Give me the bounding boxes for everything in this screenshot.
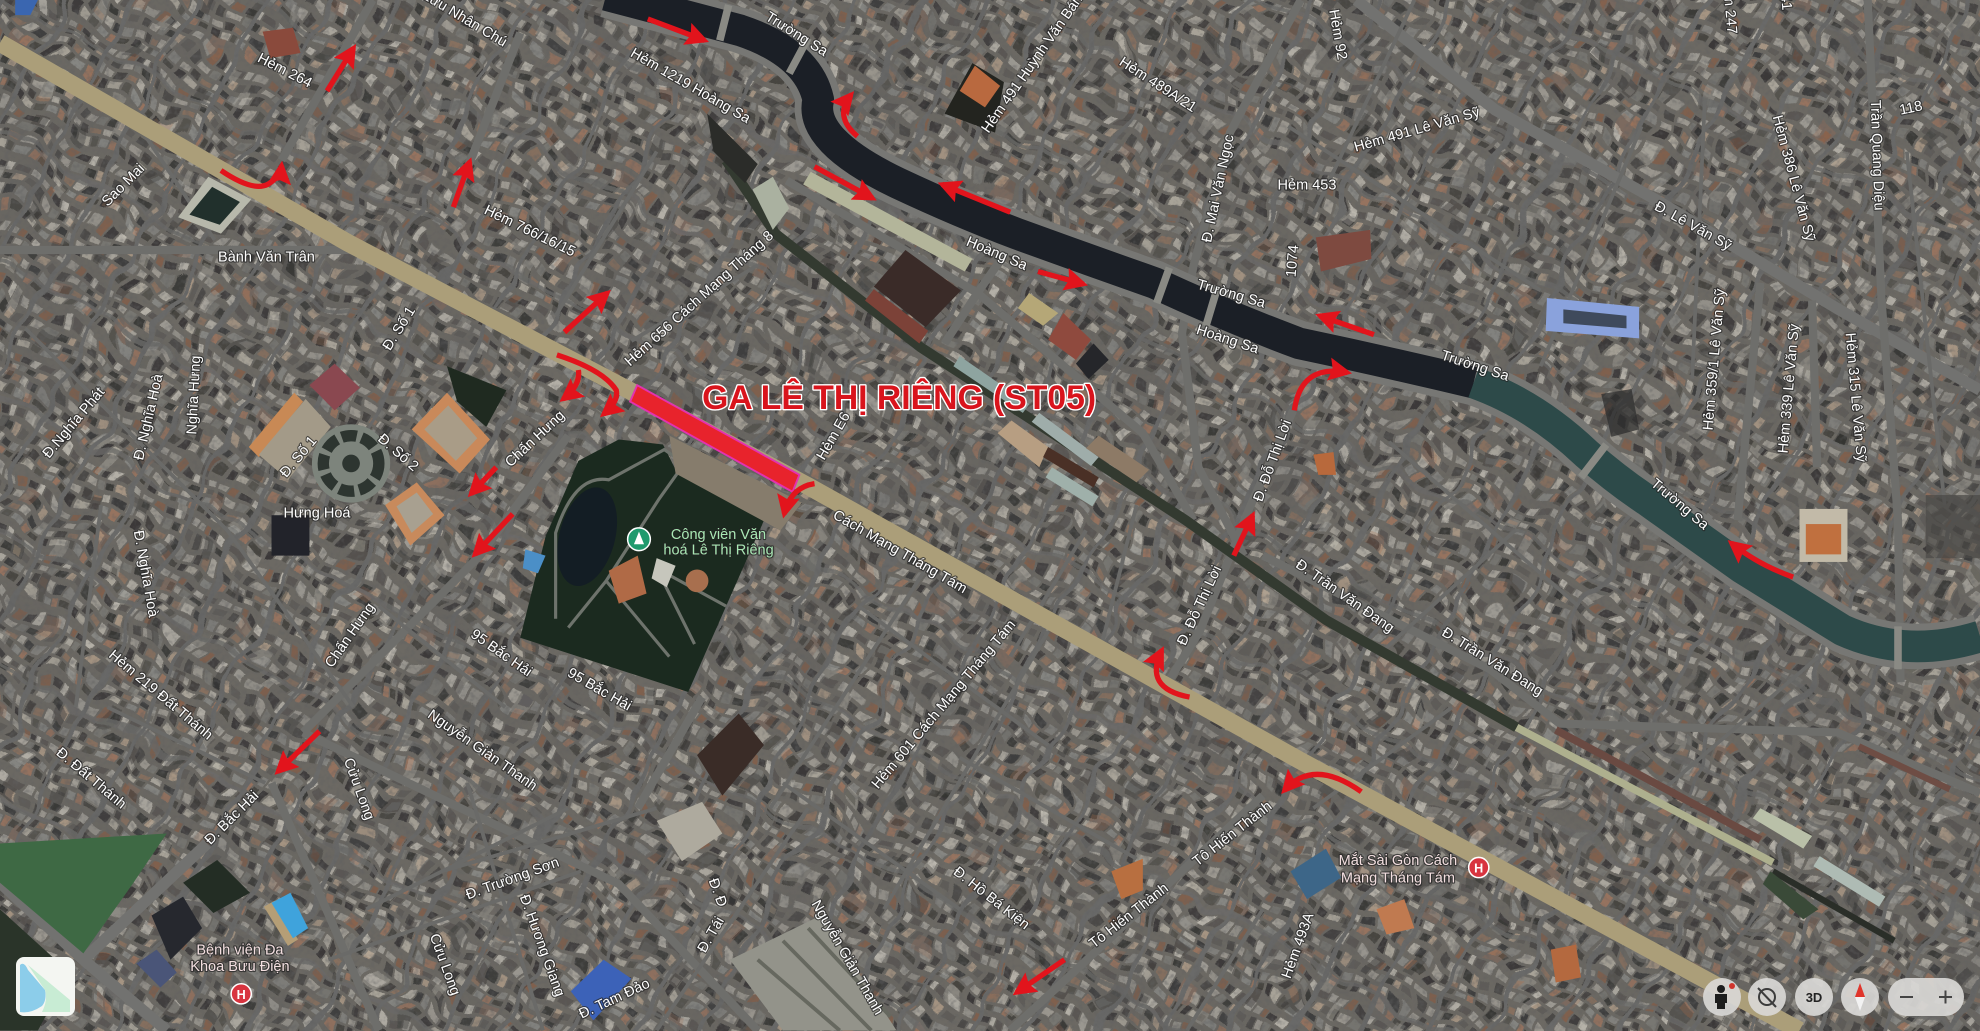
label: 95 Bắc Hải: [467, 626, 535, 680]
POI: Công viên Văn hoá Lê Thị Riêng: Công viên Văn: [671, 527, 766, 543]
label: Trường Sa: [1647, 476, 1712, 534]
label: Đ. Mai Văn Ngọc: [1199, 133, 1238, 244]
construction strip beside the park: [669, 436, 802, 530]
label: Đ. Trần Văn Đang: [1292, 557, 1397, 636]
POI: Bệnh viện Đa Khoa Bưu Điện: H: [237, 988, 246, 1002]
arrow: Tô Hiến Thành turn: [1284, 774, 1361, 792]
label: Hẻm 386 Lê Văn Sỹ: [1769, 113, 1818, 244]
label: Đ. Hương Giang: [516, 893, 568, 999]
arrow: Chấn Hưng: [471, 467, 496, 494]
label: Đ. Tái: [695, 914, 728, 956]
label: Sao Mai: [99, 161, 148, 210]
arrow: Trường Sa west: [1320, 316, 1374, 335]
label: Đ. Tam Đảo: [577, 976, 653, 1022]
POI: Bệnh viện Đa Khoa Bưu Điện: [190, 943, 290, 1004]
label: Hẻm 601 Cách Mạng Tháng Tám: [869, 617, 1019, 792]
label: Đ. Nghĩa Hoà: [131, 372, 167, 462]
label: Đ. Lê Văn Sỹ: [1652, 199, 1735, 254]
label: Hẻm 656 Cách Mạng Tháng 8: [622, 228, 777, 370]
POI: Mắt Sài Gòn Cách Mạng Tháng Tám: H: [1474, 862, 1483, 876]
arrow: Trường Sa east curve: [1731, 543, 1793, 577]
label: Hoàng Sa: [964, 234, 1030, 274]
pegman button: [1703, 978, 1741, 1016]
label: Nguyễn Giản Thanh: [424, 706, 540, 794]
label: Hẻm 491 Lê Văn Sỹ: [1352, 104, 1482, 156]
arrow: station west branch: [563, 370, 579, 399]
residential complex with circular garden: [249, 364, 506, 556]
title: GA LÊ THỊ RIÊNG (ST05): [702, 379, 1096, 417]
label: Hẻm 766/16/15: [481, 202, 578, 260]
label: Đ. Số 1: [277, 433, 320, 481]
label: Hưng Hoá: [283, 506, 351, 522]
label: Hẻm 219 Đất Thánh: [105, 647, 216, 743]
compass button: [1841, 978, 1879, 1016]
green field: [0, 833, 167, 953]
label: Cửu Long: [426, 932, 463, 998]
dark trees and buildings, bottom left: [0, 860, 250, 1030]
label: Chấn Hưng: [322, 600, 378, 671]
arrow: Hoàng Sa: [1038, 272, 1083, 284]
bottom blocks: [571, 713, 1341, 1030]
POI: Bệnh viện Đa Khoa Bưu Điện: Bệnh viện Đa: [196, 943, 284, 959]
swimming pool: [264, 893, 308, 946]
label: Hoàng Sa: [1194, 322, 1261, 358]
arrow: CMT8 turn: [1156, 650, 1190, 697]
label: 1074: [1284, 244, 1302, 278]
label: Hẻm 339 Lê Văn Sỹ: [1776, 322, 1803, 454]
arrow: north-west side street: [453, 162, 470, 207]
label: Trường Sa: [1439, 348, 1512, 385]
label: Chấn Hưng: [502, 408, 568, 471]
label: Đ. Đất Thánh: [53, 745, 129, 812]
label: Hẻm 453: [1278, 177, 1336, 193]
label: Trường Sa: [1195, 277, 1268, 312]
orange building complex: [1799, 495, 1980, 562]
arrow: station west turn: [557, 355, 617, 414]
traffic diversion arrows: [221, 19, 1793, 993]
canal: Nhiêu Lộc - Thị Nghè: [606, 0, 1980, 646]
POI: Bệnh viện Đa Khoa Bưu Điện: Khoa Bưu Điện: [190, 959, 290, 975]
label: Hẻm 359/1 Lê Văn Sỹ: [1701, 287, 1729, 431]
station footprint: red box: [630, 385, 799, 492]
arrow: U-turn north-west: [221, 165, 282, 186]
label: Đ. Số 1: [380, 304, 419, 354]
label: Hẻm 493A: [1279, 910, 1318, 981]
label: Tô Hiến Thành: [1086, 880, 1172, 952]
label: Đ. Nghĩa Hoà: [130, 529, 161, 619]
POI: Công viên Văn hoá Lê Thị Riêng: hoá Lê Thị Riêng: [663, 542, 774, 558]
arrow: Trường Sa top: [648, 19, 705, 40]
label: Hẻm E6: [814, 409, 854, 463]
park: Công viên Văn hoá Lê Thị Riêng: [520, 439, 764, 692]
arrow: Hẻm 656: [564, 293, 607, 332]
layer thumbnail button: [16, 957, 75, 1016]
green diamond compound by Bành Văn Trân: [178, 177, 251, 234]
label: Hẻm 315 Lê Văn Sỹ: [1842, 332, 1869, 464]
label: Đ. Bắc Hải: [201, 787, 262, 848]
arrow: Chấn Hưng lower: [475, 514, 513, 554]
3D button: [1795, 978, 1833, 1016]
label: Bành Văn Trân: [218, 249, 315, 265]
label: Nghĩa Hưng: [184, 355, 204, 435]
label: 118: [1898, 98, 1924, 119]
POI: Mắt Sài Gòn Cách Mạng Tháng Tám: [1339, 852, 1489, 887]
arrow: Hồ Bá Kiện: [1017, 960, 1065, 993]
label: Nguyễn Giản Thanh: [808, 897, 887, 1018]
label: Đ. Đỗ Thị Lời: [1250, 417, 1295, 504]
arrow: canal west: [942, 184, 1010, 212]
arrow: Bắc Hải: [278, 731, 319, 772]
label: 95 Bắc Hải: [565, 664, 635, 714]
label: Hẻm 264: [255, 50, 315, 91]
label: Đ. Đỗ Thị Lời: [1174, 563, 1225, 648]
label: Cách Mạng Tháng Tám: [830, 507, 970, 597]
POI: Mắt Sài Gòn Cách Mạng Tháng Tám: Mắt Sài Gòn Cách: [1339, 852, 1457, 869]
orange roofs scattered: [15, 0, 1581, 982]
label: Đ. Trần Văn Đang: [1439, 625, 1546, 700]
label: Đ. Số 2: [374, 431, 421, 475]
label: Hẻm 1219 Hoàng Sa: [628, 45, 754, 127]
railway line: [726, 160, 1950, 941]
label: Hẻm 92: [1325, 8, 1350, 61]
3D button: 3D: [1806, 990, 1822, 1005]
arrow: canal curve: [844, 95, 857, 136]
arrow: Đỗ Thị Lời: [1234, 515, 1253, 556]
label: Trần Quang Diệu: [1867, 100, 1887, 211]
label: Hẻm 489A/21: [1116, 54, 1199, 116]
arrow: Hẻm 264: [327, 48, 354, 91]
dark tower south of blue building: [1601, 389, 1639, 437]
label: Trường Sa: [762, 9, 831, 60]
POI: Mắt Sài Gòn Cách Mạng Tháng Tám: Mạng Tháng Tám: [1341, 871, 1455, 887]
label: Tô Hiến Thành: [1190, 798, 1275, 870]
POI: Công viên Văn hoá Lê Thị Riêng: [628, 527, 774, 558]
canal bridges: [720, 5, 1898, 669]
zoom pill: [1888, 978, 1964, 1016]
map controls: [1703, 978, 1964, 1016]
arrow: canal south bank: [815, 167, 873, 198]
label: Đ. Đ: [705, 876, 730, 909]
tilt button: [1748, 978, 1786, 1016]
arrow: Đỗ Thị Lời turn: [1294, 371, 1347, 410]
blue building: [1546, 298, 1639, 338]
label: Đ. Hồ Bá Kiện: [950, 864, 1032, 933]
label: Đ.Nghĩa Phát: [40, 384, 108, 462]
arrow: station east turn: [784, 484, 815, 514]
label: Cửu Long: [340, 756, 377, 822]
factory roofs and station buildings: [707, 63, 1885, 919]
label: Đ. Trường Sơn: [464, 855, 561, 903]
